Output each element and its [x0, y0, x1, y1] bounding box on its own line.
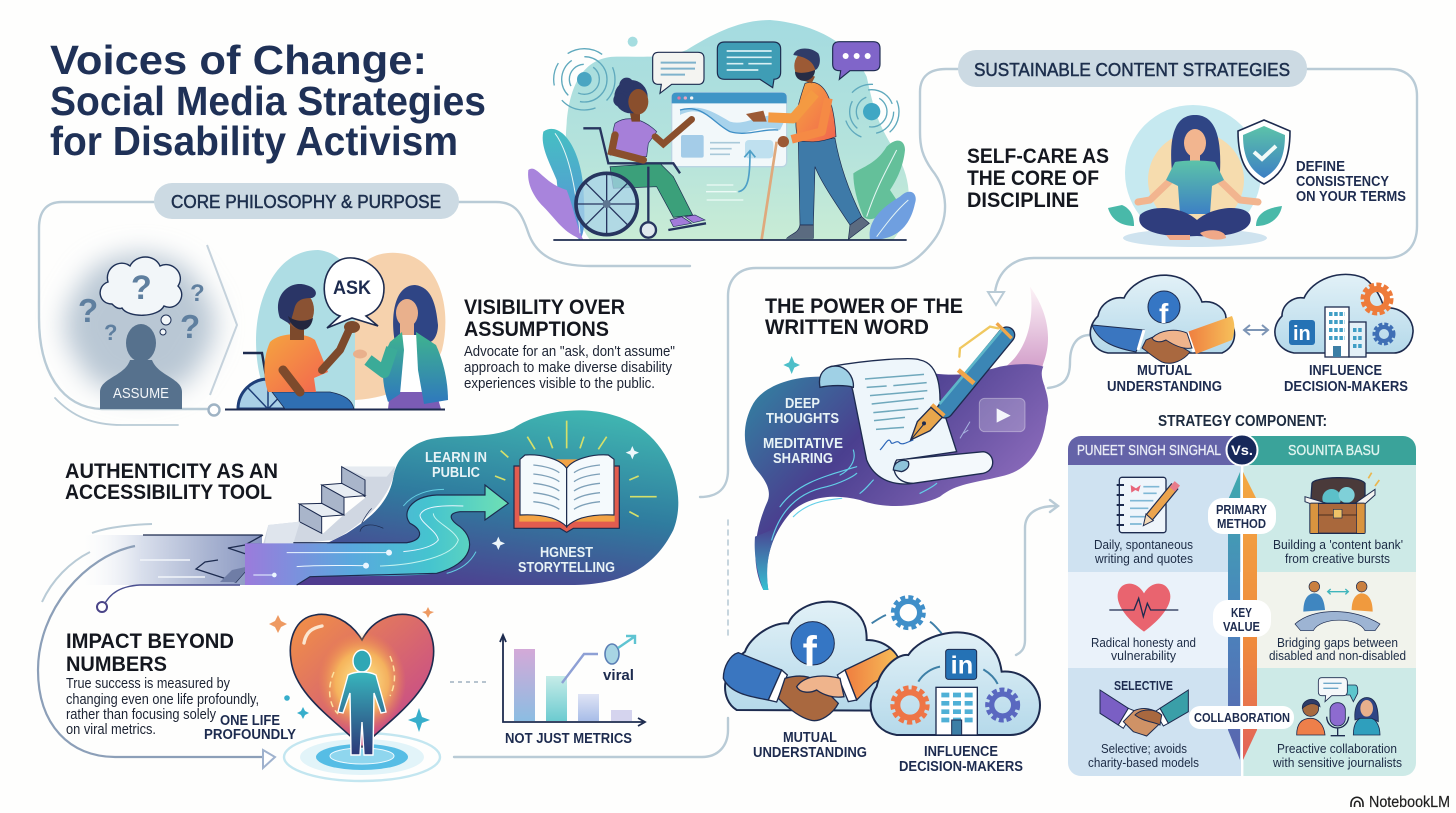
text block: impact beyond numbers: NUMBERS	[66, 653, 167, 676]
section pill: core philosophy and purpose	[154, 183, 459, 219]
text block: visibility over assumptions: ASSUMPTIONS	[464, 318, 609, 341]
cloud with facebook logo	[725, 602, 900, 711]
chip: key value	[1213, 600, 1271, 637]
labels under small clouds: UNDERSTANDING	[1107, 379, 1222, 395]
text: daily writing: writing and quotes	[1094, 551, 1193, 566]
versus badge: Vs.	[1231, 443, 1253, 458]
connector node	[208, 404, 220, 416]
motion streaks	[42, 524, 152, 602]
labels under small clouds: DECISION-MAKERS	[1284, 379, 1408, 395]
chip: collaboration: COLLABORATION	[1194, 710, 1290, 725]
icon: treasure chest content bank	[1305, 473, 1379, 533]
section pill: core philosophy and purpose: CORE PHILOSOPHY & PURPOSE	[171, 192, 441, 212]
comparison table heading: STRATEGY COMPONENT:	[1158, 413, 1327, 430]
section pill: sustainable content strategies: SUSTAINABLE CONTENT STRATEGIES	[974, 60, 1290, 80]
water ripple	[284, 733, 440, 781]
written word labels	[763, 396, 843, 467]
notebooklm logo: NotebookLM	[1369, 794, 1450, 811]
text: content bank	[1273, 537, 1403, 566]
self-care heading	[967, 145, 1109, 212]
authenticity illustration labels	[425, 450, 615, 576]
header: puneet singh singhal: PUNEET SINGH SINGHAL	[1077, 443, 1221, 459]
text block: visibility over assumptions: Advocate for an "ask, don't assume"	[464, 344, 675, 360]
flow streaks	[772, 450, 937, 540]
gears	[893, 667, 1017, 722]
small cloud: mutual understanding: f	[1159, 298, 1169, 329]
central divider arrows	[1228, 472, 1257, 760]
chip: key value: KEY	[1231, 605, 1252, 620]
text: selective collaboration: charity-based models	[1088, 755, 1199, 770]
chip: key value: VALUE	[1223, 619, 1260, 634]
thought cloud	[100, 257, 182, 335]
heart illustration with person	[269, 607, 440, 781]
heading: authenticity: ACCESSIBILITY TOOL	[65, 481, 272, 504]
question marks: ?	[78, 292, 98, 329]
authenticity illustration labels: PUBLIC	[432, 465, 480, 481]
large cloud labels	[753, 730, 1023, 775]
stream light lines	[253, 489, 476, 577]
web browser window	[672, 93, 787, 200]
header: sounita basu: SOUNITA BASU	[1288, 443, 1380, 459]
ground line	[553, 237, 907, 242]
scroll text lines	[865, 374, 927, 429]
text: bridging gaps: Bridging gaps between	[1277, 635, 1398, 650]
text: selective collaboration: Selective; avoids	[1101, 741, 1187, 756]
title: Voices of Change:	[50, 37, 427, 83]
heading: authenticity: AUTHENTICITY AS AN	[65, 460, 278, 483]
stone staircase	[263, 467, 395, 543]
chip: primary method	[1208, 498, 1276, 534]
video play tile	[979, 398, 1025, 432]
large cloud labels: DECISION-MAKERS	[899, 759, 1023, 775]
label: one life profoundly: PROFOUNDLY	[204, 727, 296, 743]
impact connector arc and arrow	[38, 546, 275, 768]
text block: visibility over assumptions: approach to make diverse disability	[464, 360, 673, 376]
text: proactive collaboration	[1272, 741, 1402, 770]
heading: authenticity	[65, 460, 278, 504]
title: for Disability Activism	[50, 118, 458, 164]
cloud with linkedin logo	[871, 632, 1040, 735]
central illustration: two people discussing online	[528, 20, 916, 240]
sparkles	[269, 607, 434, 633]
person with cane	[746, 48, 869, 239]
text block: impact beyond numbers: IMPACT BEYOND	[66, 630, 234, 653]
person in wheelchair	[576, 78, 706, 238]
crack in ground	[196, 535, 263, 582]
icon: selective handshake: SELECTIVE	[1114, 678, 1173, 693]
small cloud: influence decision-makers: in	[1293, 323, 1311, 345]
text: radical honesty	[1091, 635, 1196, 663]
office building	[936, 687, 977, 735]
text block: impact beyond numbers: changing even one life profoundly,	[66, 692, 259, 708]
man in wheelchair	[238, 284, 360, 409]
backdrop blob	[566, 20, 909, 240]
arrow down to written word	[988, 292, 1004, 305]
text: proactive collaboration: with sensitive journalists	[1272, 755, 1402, 770]
glowing stream with arrow	[245, 485, 508, 585]
ask illustration	[225, 250, 448, 410]
labels under small clouds	[1107, 363, 1408, 395]
woman	[353, 285, 448, 409]
table backgrounds	[1068, 436, 1416, 776]
text: bridging gaps	[1269, 635, 1406, 663]
authenticity illustration labels: STORYTELLING	[518, 560, 615, 576]
icon: journalists with microphone	[1297, 678, 1380, 736]
dashed link to chart	[450, 681, 486, 683]
section pill: sustainable content strategies	[958, 50, 1307, 87]
large clouds: partnership illustration: in	[951, 651, 973, 679]
text: bridging gaps: disabled and non-disabled	[1269, 648, 1406, 663]
written word labels: SHARING	[773, 451, 833, 467]
written word labels: THOUGHTS	[766, 411, 839, 427]
question marks	[78, 280, 205, 345]
small cloud: influence decision-makers	[1275, 274, 1413, 357]
self-care heading: DISCIPLINE	[967, 189, 1079, 212]
authenticity illustration labels: HGNEST	[540, 545, 593, 561]
icon: notebook and pencil	[1117, 477, 1177, 533]
speech bubble: ask	[324, 258, 384, 328]
dark blob	[245, 410, 678, 585]
written word illustration: scroll and fountain pen	[745, 287, 1048, 590]
heading: power of the written word: WRITTEN WORD	[765, 316, 929, 339]
signal ripples	[554, 37, 899, 139]
question marks: ?	[180, 308, 200, 345]
text block: impact beyond numbers	[66, 630, 259, 738]
large cloud labels: MUTUAL	[783, 730, 837, 746]
fading broken ground band	[76, 535, 262, 585]
speech bubble: ask: ASK	[333, 278, 371, 299]
text: daily writing: Daily, spontaneous	[1094, 537, 1193, 552]
fog	[65, 254, 215, 394]
chevron from assume to ask	[207, 245, 237, 395]
text: radical honesty: vulnerability	[1111, 648, 1176, 663]
text block: visibility over assumptions: experiences visible to the public.	[464, 376, 655, 392]
ground line	[225, 408, 445, 410]
top gear with arrows	[872, 598, 942, 633]
comparison table	[1068, 434, 1416, 776]
chip: primary method: PRIMARY	[1216, 502, 1267, 517]
text: selective collaboration	[1088, 741, 1199, 770]
define consistency label: DEFINE	[1296, 159, 1345, 175]
heading: power of the written word	[765, 295, 963, 339]
icon: shield with check	[1238, 120, 1290, 184]
written word labels: DEEP	[785, 396, 820, 412]
thought cloud: ?	[131, 269, 152, 307]
text: daily writing	[1094, 537, 1193, 566]
bars	[514, 649, 632, 721]
text: content bank: from creative bursts	[1285, 551, 1390, 566]
define consistency label: CONSISTENCY	[1296, 174, 1389, 190]
open book	[514, 455, 619, 532]
labels under small clouds: MUTUAL	[1137, 363, 1192, 379]
question marks: ?	[190, 280, 205, 307]
small cloud: mutual understanding	[1090, 275, 1235, 363]
silhouette	[100, 324, 182, 409]
assume illustration	[65, 254, 215, 409]
large cloud labels: INFLUENCE	[924, 744, 998, 760]
bar chart: not just metrics: NOT JUST METRICS	[505, 731, 632, 747]
axes	[500, 635, 645, 726]
written word labels: MEDITATIVE	[763, 436, 843, 452]
rays and sparkles	[495, 421, 657, 517]
large clouds: partnership illustration: f	[803, 628, 818, 676]
silhouette: ASSUME	[113, 386, 169, 402]
icon: meditating woman	[1108, 105, 1282, 247]
handshake	[723, 648, 900, 721]
fountain pen	[911, 323, 1012, 440]
define consistency label	[1296, 159, 1406, 205]
authenticity illustration labels: LEARN IN	[425, 450, 487, 466]
person in heart	[338, 650, 386, 755]
text: content bank: Building a 'content bank'	[1273, 537, 1403, 552]
text: proactive collaboration: Preactive collaboration	[1277, 741, 1397, 756]
question marks: ?	[104, 320, 117, 345]
heading: power of the written word: THE POWER OF THE	[765, 295, 963, 318]
large cloud labels: UNDERSTANDING	[753, 745, 867, 761]
versus badge	[1226, 434, 1258, 466]
authenticity illustration: broken path to open book	[42, 410, 678, 612]
sparkle	[783, 356, 800, 374]
text: radical honesty: Radical honesty and	[1091, 635, 1196, 650]
label: one life profoundly: ONE LIFE	[220, 713, 280, 729]
text block: visibility over assumptions: VISIBILITY OVER	[464, 296, 625, 319]
icon: selective handshake	[1100, 678, 1188, 736]
pink swoosh	[993, 287, 1048, 387]
large clouds: partnership illustration	[723, 598, 1040, 735]
self-care heading: SELF-CARE AS	[967, 145, 1109, 168]
trend line and viral marker	[562, 636, 635, 683]
label: one life profoundly	[204, 713, 296, 743]
text block: visibility over assumptions	[464, 296, 675, 392]
icon: two people on bridge	[1295, 581, 1380, 631]
icon: heart with pulse	[1109, 584, 1178, 632]
scroll paper	[819, 359, 993, 484]
chip: collaboration	[1189, 706, 1294, 729]
title: Social Media Strategies	[50, 78, 486, 124]
flowing purple shape	[745, 364, 1048, 590]
chip: primary method: METHOD	[1217, 516, 1266, 531]
labels under small clouds: INFLUENCE	[1309, 363, 1382, 379]
title	[50, 37, 486, 164]
text block: impact beyond numbers: on viral metrics.	[66, 722, 156, 738]
text block: impact beyond numbers: True success is measured by	[66, 676, 231, 692]
self-care heading: THE CORE OF	[967, 167, 1099, 190]
define consistency label: ON YOUR TERMS	[1296, 189, 1406, 205]
text block: impact beyond numbers: rather than focusing solely	[66, 707, 217, 723]
bar chart: not just metrics: viral	[603, 667, 634, 684]
speech bubbles	[653, 42, 880, 93]
leaves	[528, 129, 916, 240]
bar chart: not just metrics	[500, 635, 645, 747]
double arrow between clouds	[1244, 325, 1268, 335]
